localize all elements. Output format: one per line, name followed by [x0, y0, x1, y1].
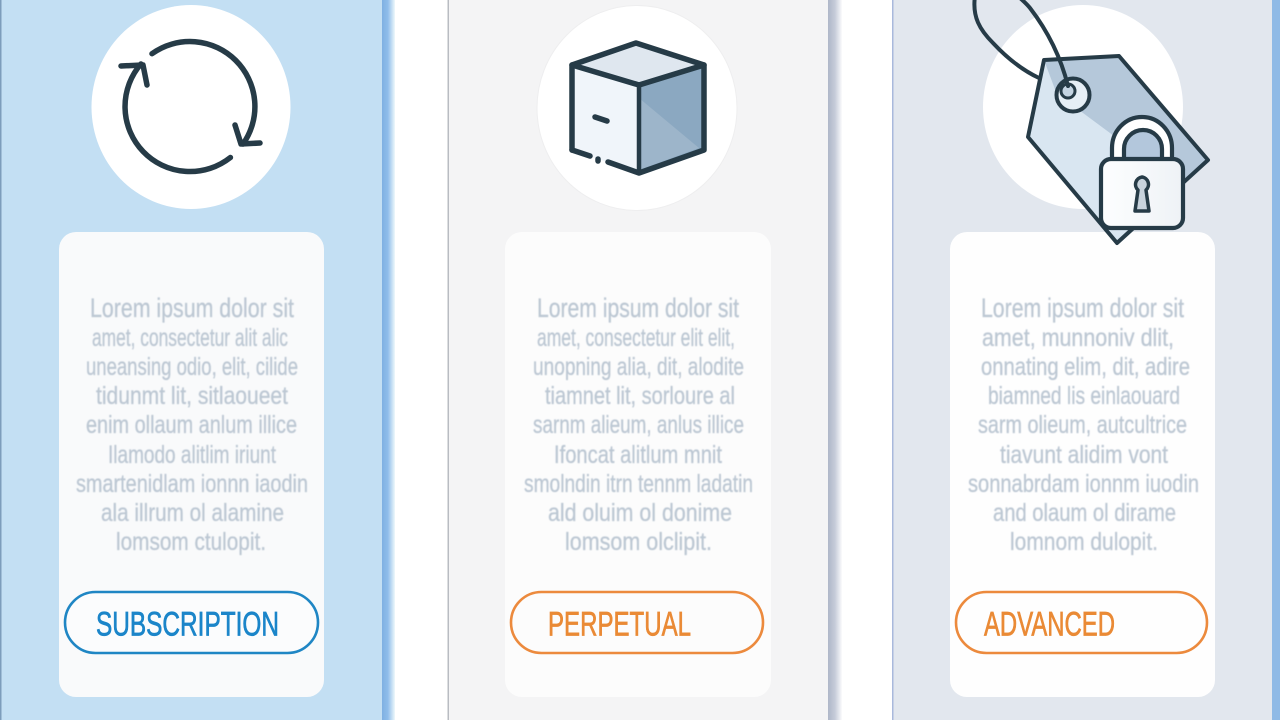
text card: subscription description: lomsom ctulopit. [116, 528, 266, 556]
text card: subscription description: enim ollaum anlum illice [86, 411, 297, 439]
text card: subscription description [59, 232, 324, 697]
button: perpetual [511, 592, 763, 653]
button: advanced: ADVANCED [984, 606, 1115, 644]
text card: subscription description: Lorem ipsum dolor sit [90, 293, 294, 323]
panel: subscription [0, 0, 395, 720]
text card: perpetual description: smolndin itrn tennm ladatin [524, 470, 753, 498]
icon: cycle arrows in circle [92, 5, 290, 209]
text card: perpetual description: unopning alia, dit, alodite [533, 353, 744, 381]
text card: perpetual description: amet, consectetur elit elit, [537, 324, 735, 352]
text card: perpetual description: sarnm alieum, anlus illice [533, 411, 744, 439]
button: perpetual: PERPETUAL [548, 606, 691, 644]
icon: cube in circle [537, 6, 737, 210]
text card: advanced description [950, 232, 1215, 697]
text card: advanced description: biamned lis einlaouard [988, 382, 1180, 410]
text card: advanced description: sonnabrdam ionnm iuodin [968, 470, 1199, 498]
text card: perpetual description: ald oluim ol donime [548, 499, 732, 527]
background circle [983, 5, 1183, 209]
button: advanced [956, 592, 1207, 653]
text card: subscription description: uneansing odio, elit, cilide [86, 353, 298, 381]
text card: perpetual description [505, 232, 771, 697]
text card: advanced description: lomnom dulopit. [1010, 528, 1158, 556]
text card: advanced description: amet, munnoniv dlit, [982, 324, 1174, 352]
text card: subscription description: tidunmt lit, sitlaoueet [96, 382, 288, 410]
text card: subscription description: ala illrum ol alamine [101, 499, 284, 527]
text card: subscription description: amet, consectetur alit alic [92, 324, 288, 352]
text card: advanced description: tiavunt alidim vont [1000, 441, 1168, 469]
text card: perpetual description: tiamnet lit, sorloure al [545, 382, 735, 410]
panel: perpetual [448, 0, 842, 720]
button: subscription: SUBSCRIPTION [96, 606, 279, 644]
text card: subscription description: smartenidlam ionnn iaodin [76, 470, 308, 498]
text card: perpetual description: lomsom olclipit. [565, 528, 712, 556]
panel: advanced [892, 0, 1280, 720]
text card: advanced description: onnating elim, dit, adire [981, 353, 1190, 381]
text card: subscription description: Ilamodo alitlim iriunt [108, 441, 276, 469]
text card: perpetual description: Lorem ipsum dolor sit [537, 293, 739, 323]
text card: advanced description: sarm olieum, autcultrice [978, 411, 1187, 439]
text card: advanced description: Lorem ipsum dolor sit [981, 293, 1184, 323]
button: subscription [65, 592, 318, 653]
icon: padlock [1101, 117, 1183, 228]
icon: price tag with padlock [974, 0, 1208, 243]
text card: advanced description: and olaum ol dirame [993, 499, 1176, 527]
text card: perpetual description: Ifoncat alitlum mnit [554, 441, 722, 469]
